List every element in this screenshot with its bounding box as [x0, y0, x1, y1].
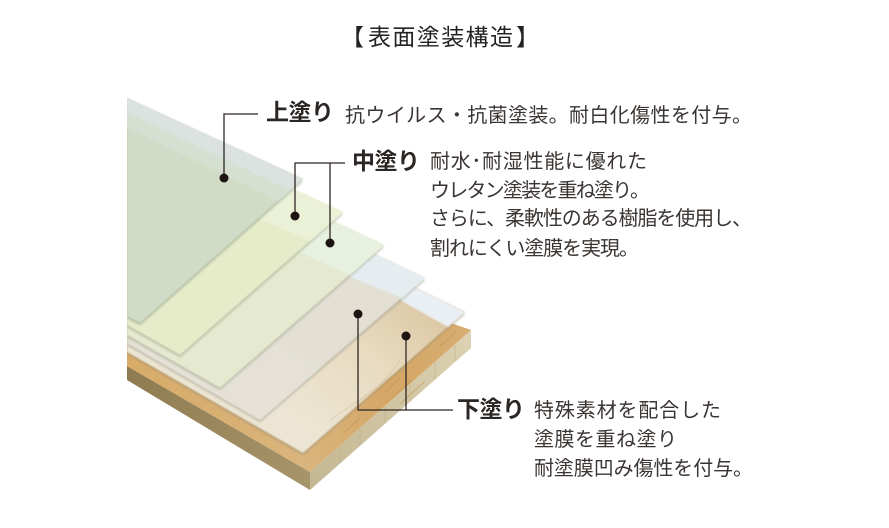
layer: top coat	[127, 98, 303, 325]
label: 上塗り: 上塗り	[266, 99, 334, 125]
label: 中塗り	[352, 148, 752, 260]
title: 【	[341, 24, 364, 50]
label: 上塗り	[266, 99, 752, 127]
label: 下塗り	[457, 396, 753, 480]
leader: top coat	[220, 114, 258, 182]
label: 下塗り: 耐塗膜凹み傷性を付与。	[534, 457, 753, 480]
layer: undercoat 2	[127, 287, 466, 456]
layer: middle coat 2	[127, 221, 384, 390]
layer: undercoat 1	[127, 254, 426, 422]
label: 中塗り: さらに、柔軟性のある樹脂を使用し、	[430, 207, 752, 230]
title: 表面塗装構造	[368, 24, 513, 50]
label: 中塗り: 中塗り	[352, 148, 420, 174]
leader: middle coat	[290, 163, 345, 248]
label: 下塗り: 下塗り	[457, 396, 525, 422]
layer: middle coat 1	[127, 188, 344, 358]
label: 下塗り: 塗膜を重ね塗り	[534, 428, 677, 451]
diagram: layered floor board	[127, 98, 471, 490]
label: 下塗り: 特殊素材を配合した	[534, 399, 721, 422]
label: 中塗り: 割れにくい塗膜を実現。	[430, 237, 639, 260]
wood board base	[127, 324, 471, 490]
label: 中塗り: 耐水･耐湿性能に優れた	[430, 150, 647, 173]
leader: undercoat	[354, 310, 453, 410]
label: 上塗り: 抗ウイルス・抗菌塗装。耐白化傷性を付与。	[345, 104, 752, 127]
title: 】	[516, 24, 539, 50]
label: 中塗り: ウレタン塗装を重ね塗り。	[430, 179, 650, 202]
